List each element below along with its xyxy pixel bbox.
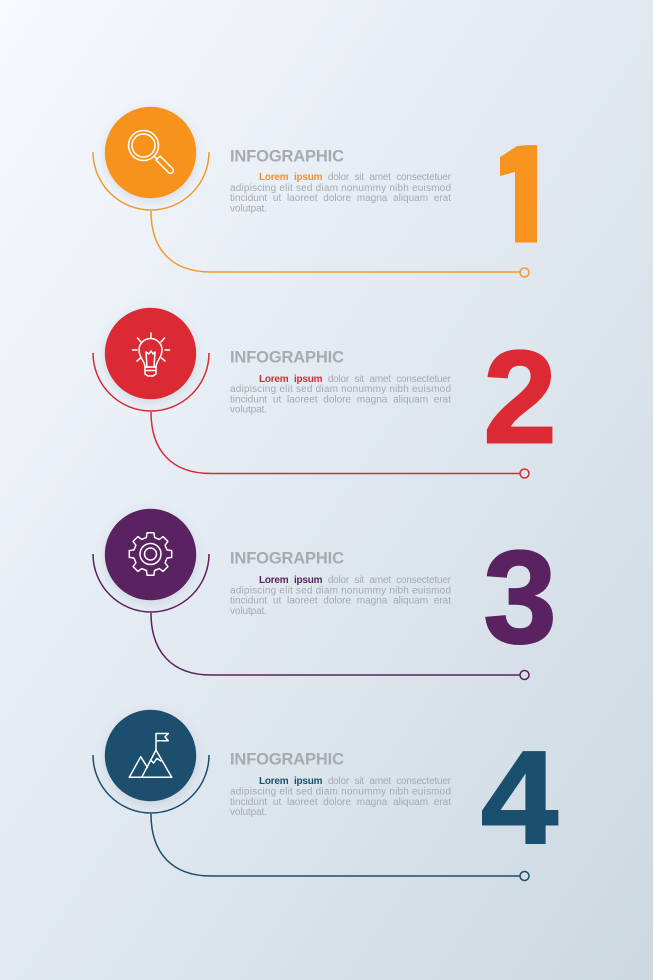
- body text 3: adipiscing elit sed diam nonummy nibh euismod: [230, 586, 451, 596]
- step 4: [93, 710, 558, 880]
- body text 4: Lorem ipsum dolor sit amet consectetuer: [259, 776, 452, 787]
- body text 3: volutpat.: [230, 606, 267, 617]
- circle 2: [105, 308, 196, 399]
- step 2: [93, 308, 557, 478]
- step 1: [93, 107, 561, 277]
- connector line 3: [93, 554, 529, 680]
- icon: magnifier: [128, 130, 173, 173]
- body text 2: [230, 374, 452, 416]
- icon: mountain with flag: [129, 734, 172, 777]
- body text 2: adipiscing elit sed diam nonummy nibh euismod: [230, 384, 451, 395]
- body text 3: Lorem ipsum dolor sit amet consectetuer: [259, 575, 452, 586]
- connector line 1: [93, 152, 529, 277]
- body text 2: Lorem ipsum dolor sit amet consectetuer: [259, 374, 452, 385]
- body text 1: Lorem ipsum dolor sit amet consectetuer: [259, 172, 452, 183]
- body text 1: tincidunt ut laoreet dolore magna aliquam erat: [230, 193, 451, 204]
- body text 4: adipiscing elit sed diam nonummy nibh euismod: [230, 786, 451, 798]
- number 2: 2: [483, 324, 557, 470]
- body text 2: volutpat.: [230, 404, 267, 416]
- connector line 2: [93, 353, 529, 478]
- body text 3: tincidunt ut laoreet dolore magna aliquam erat: [230, 596, 451, 606]
- icon: light bulb: [132, 333, 170, 376]
- heading 4: INFOGRAPHIC: [230, 750, 344, 768]
- number 3: 3: [483, 524, 557, 670]
- number 1: 1: [488, 121, 561, 268]
- body text 4: [230, 776, 452, 818]
- circle 3: [105, 509, 196, 600]
- body text 1: adipiscing elit sed diam nonummy nibh euismod: [230, 183, 451, 194]
- body text 2: tincidunt ut laoreet dolore magna aliquam erat: [230, 394, 451, 406]
- body text 3: [230, 575, 452, 617]
- body text 4: volutpat.: [230, 807, 267, 818]
- heading 3: INFOGRAPHIC: [230, 550, 344, 568]
- icon: gear: [129, 533, 172, 575]
- number 4: 4: [481, 723, 558, 871]
- step 3: [93, 509, 557, 680]
- heading 2: INFOGRAPHIC: [230, 348, 344, 366]
- body text 1: volutpat.: [230, 204, 267, 214]
- body text 4: tincidunt ut laoreet dolore magna aliquam erat: [230, 797, 451, 808]
- heading 1: INFOGRAPHIC: [230, 148, 344, 166]
- circle 4: [105, 710, 196, 801]
- connector line 4: [93, 755, 529, 880]
- circle 1: [105, 107, 196, 198]
- body text 1: [230, 172, 452, 214]
